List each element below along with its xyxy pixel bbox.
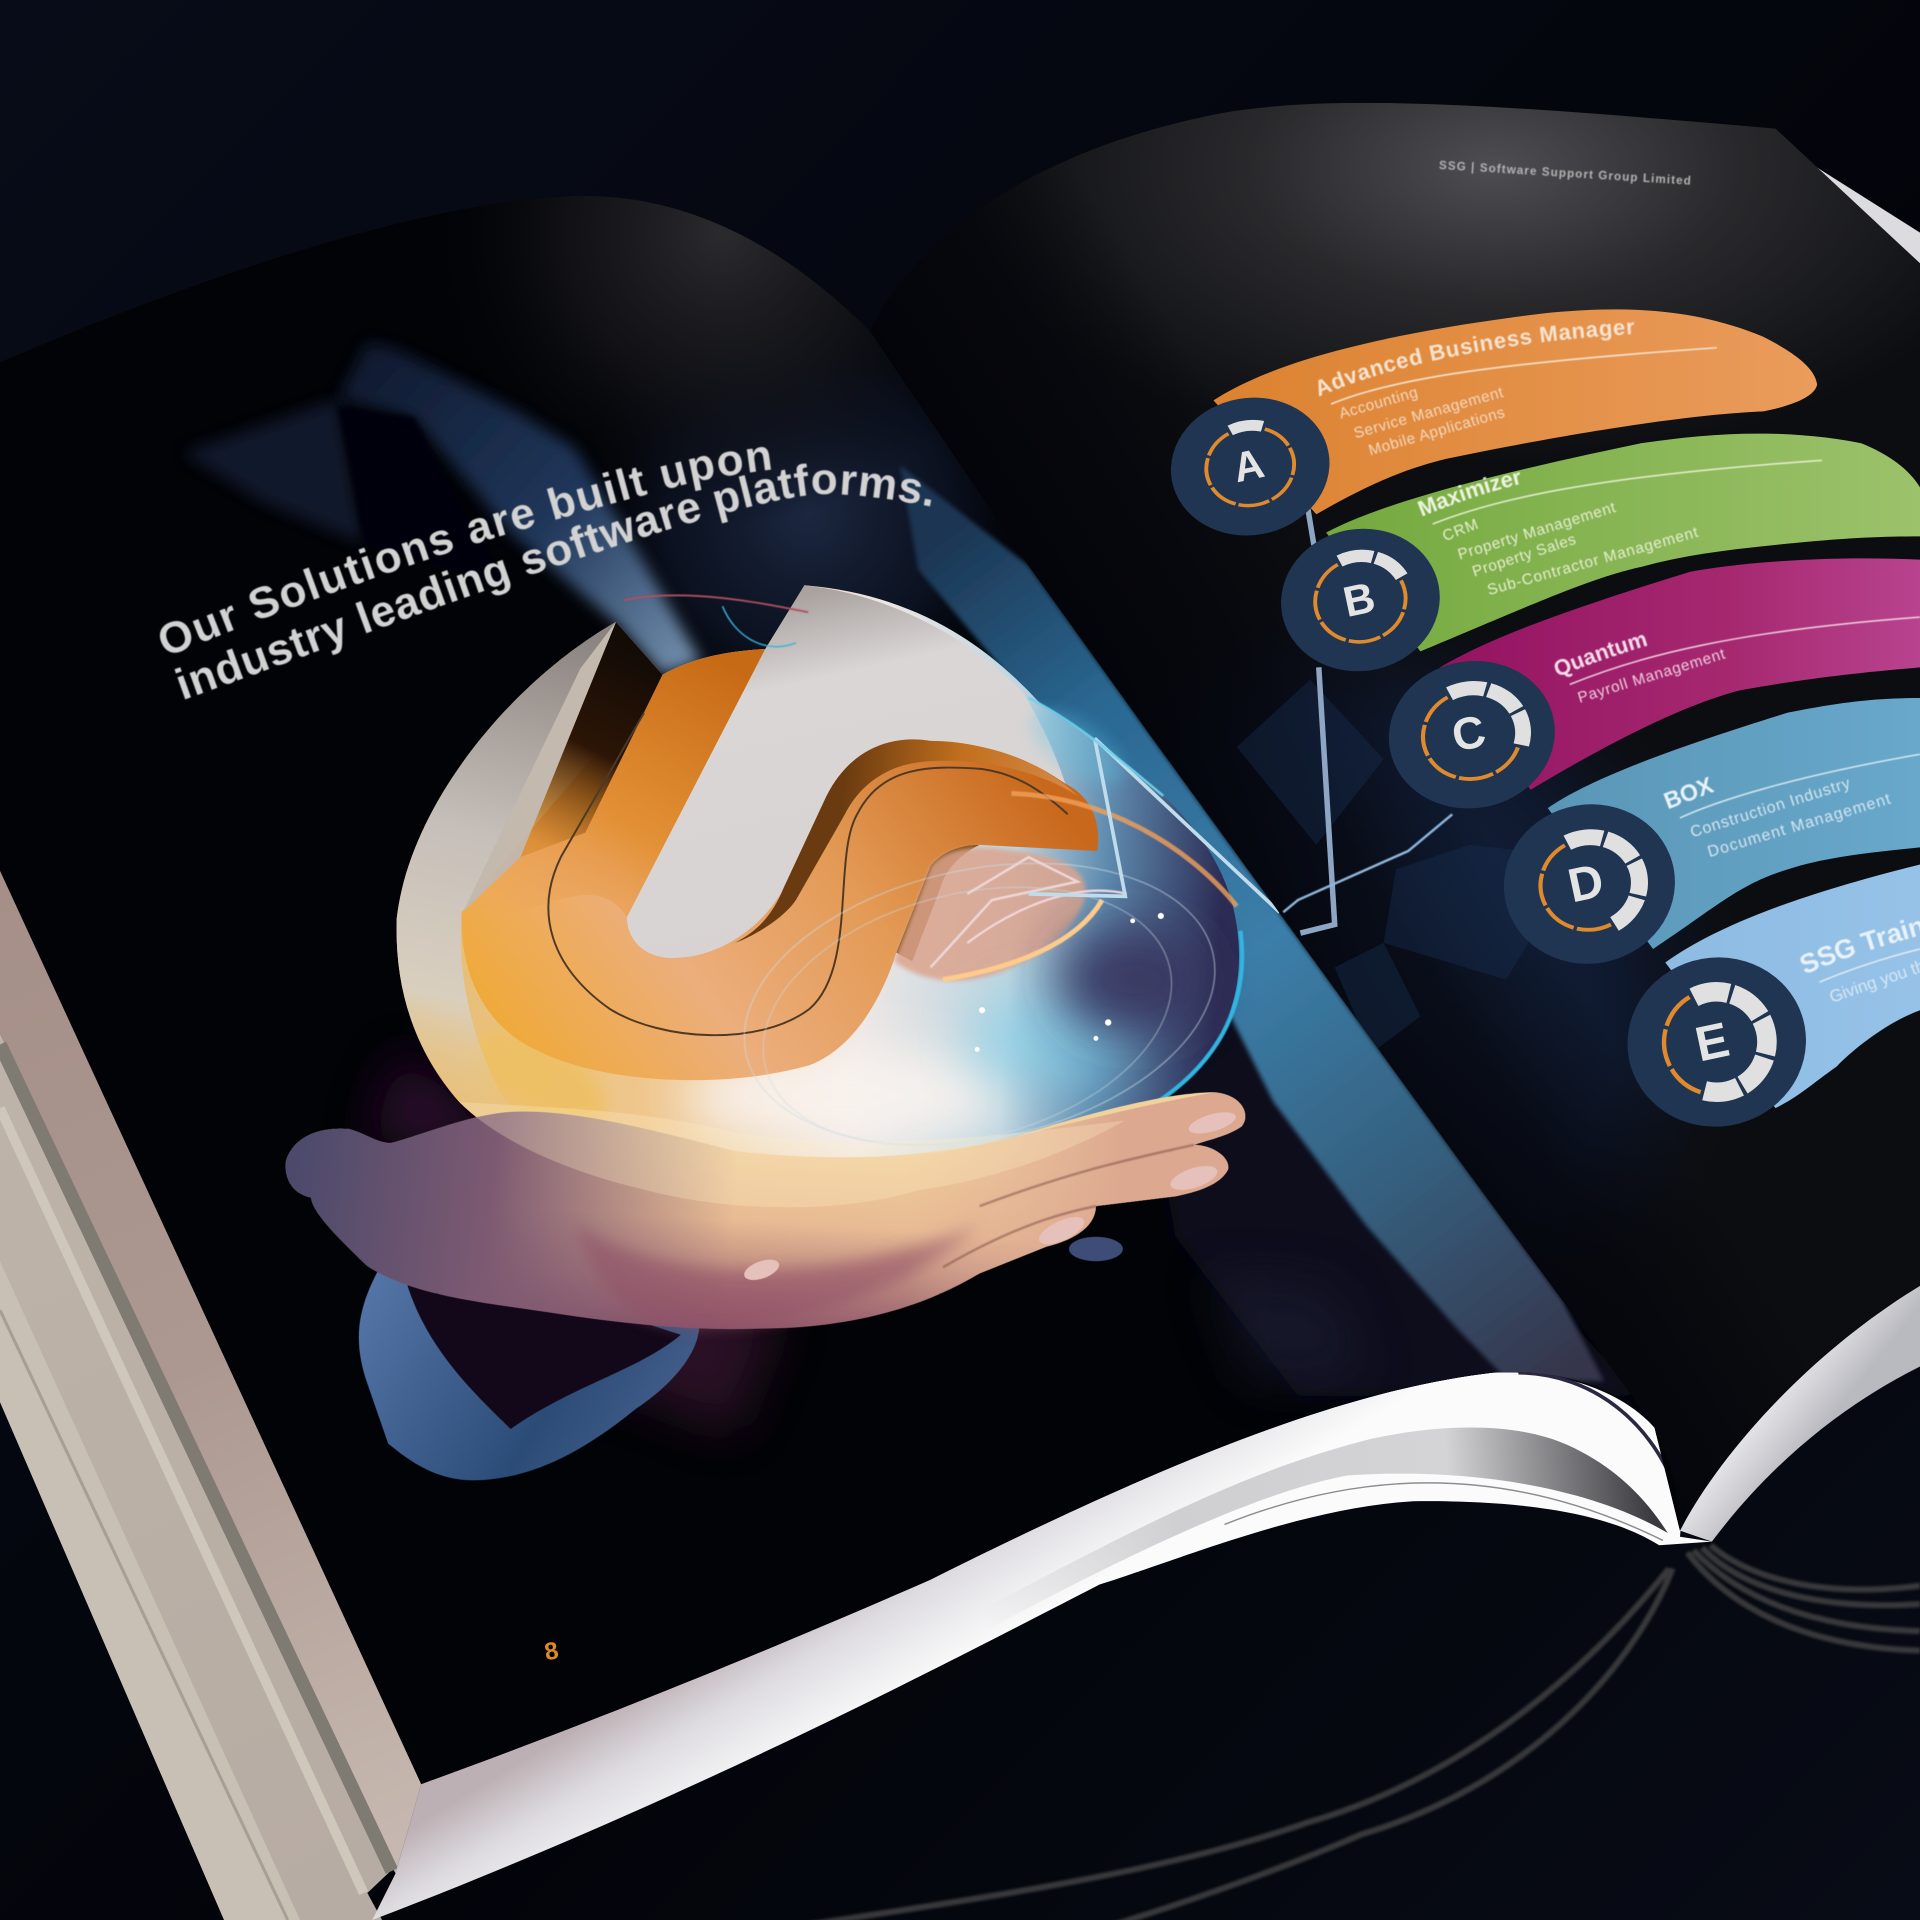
ribbon B text — [1416, 459, 1823, 599]
blue sleeve band — [900, 465, 1604, 1381]
ribbon: green — [1326, 434, 1920, 651]
suit — [367, 282, 1641, 1433]
ribbon D text: Document Management — [1706, 791, 1893, 861]
orange upper shading — [471, 649, 765, 917]
ribbon B text: CRM — [1440, 516, 1481, 545]
dark face — [520, 622, 662, 857]
necktie — [184, 343, 702, 675]
ribbon D text: Construction Industry — [1688, 775, 1852, 841]
badge E: E — [1691, 1013, 1734, 1072]
ribbon A text: Accounting — [1337, 384, 1420, 423]
tail lip — [896, 845, 980, 961]
ribbon A text: Advanced Business Manager — [1318, 322, 1635, 397]
ribbon B text: Maximizer — [1416, 472, 1520, 517]
reflections under book — [784, 1545, 1920, 1920]
orbit rings — [624, 595, 1242, 1185]
ribbon: blue — [1548, 698, 1920, 949]
badge D — [1491, 791, 1688, 977]
right page stack top corner — [1800, 157, 1920, 276]
running header: SSG | Software Support Group Limited — [1439, 159, 1691, 188]
swoosh inner line — [548, 713, 1068, 1035]
ribbon: light blue — [1665, 864, 1920, 1108]
ribbon B text: Property Sales — [1470, 531, 1578, 581]
flare streaks — [931, 793, 1237, 980]
badge A: A — [1229, 439, 1268, 491]
sparkles — [463, 913, 1164, 1177]
yellow glow lower left — [478, 1028, 610, 1119]
badge D: D — [1564, 854, 1608, 913]
orange swoosh — [461, 649, 1098, 1080]
finger tint — [906, 1092, 1245, 1310]
ribbon E text — [1800, 920, 1920, 1007]
right page stack — [1680, 1286, 1920, 1542]
disc through palm — [459, 1102, 1125, 1207]
blue glow — [967, 992, 1139, 1090]
badge C — [1377, 648, 1567, 822]
ribbon A text — [1318, 322, 1718, 459]
circuit line — [1300, 508, 1335, 933]
glowing logo sphere — [397, 585, 1280, 1207]
white tongue — [627, 585, 1065, 958]
book cover edge — [0, 871, 421, 1920]
page background pattern — [1237, 680, 1528, 1048]
ribbon: orange — [1213, 309, 1817, 514]
page block — [372, 1372, 1712, 1920]
ribbon D text: BOX — [1660, 772, 1717, 814]
hand — [285, 1092, 1245, 1480]
badge E — [1614, 943, 1819, 1141]
ribbon B text: Property Management — [1456, 499, 1618, 563]
badge C: C — [1447, 705, 1490, 762]
headline: industry leading software platforms. — [174, 462, 932, 700]
ribbon C text: Quantum — [1554, 634, 1648, 678]
ribbon A text: Mobile Applications — [1367, 404, 1507, 459]
badge A — [1160, 385, 1340, 548]
ribbon B text: Sub-Contractor Management — [1485, 524, 1701, 599]
ribbon: magenta — [1440, 558, 1920, 790]
product ribbons — [1213, 309, 1920, 1108]
badge B: B — [1339, 574, 1379, 627]
white glow lower — [686, 1047, 1004, 1145]
ribbon C text: Payroll Management — [1576, 645, 1728, 707]
inner tail window — [894, 847, 1085, 981]
right page — [1016, 103, 1920, 1530]
silver crescent — [397, 622, 616, 1145]
triangle outline — [1029, 738, 1280, 912]
ribbon A text: Service Management — [1352, 384, 1506, 442]
ribbon D text — [1660, 754, 1920, 861]
headline: Our Solutions are built upon — [159, 446, 772, 654]
page top sheen — [530, 196, 872, 488]
disc base — [397, 585, 1239, 1207]
brown lip — [735, 739, 1078, 943]
badge B — [1270, 516, 1451, 684]
left page — [0, 196, 1680, 1784]
page number: 8 — [542, 1637, 561, 1666]
ribbon C text — [1554, 616, 1920, 707]
